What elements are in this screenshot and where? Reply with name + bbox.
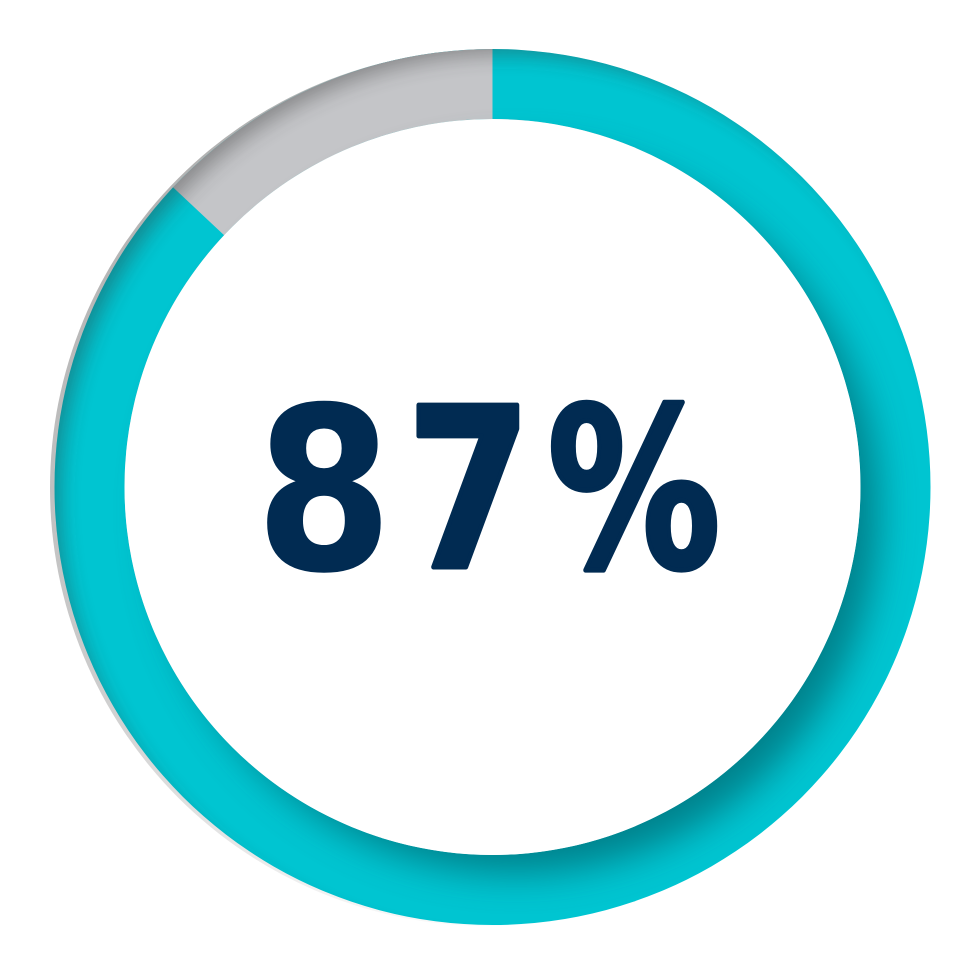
outer edge shading (54, 49, 850, 845)
percentage label: 7 (406, 360, 532, 620)
inner edge shading (154, 149, 878, 873)
percentage label: 8 (256, 359, 392, 622)
ring (54, 49, 930, 925)
outer shadow crescent (50, 50, 926, 926)
ring segment: 13% grey (173, 49, 492, 235)
percentage label: % (547, 361, 721, 619)
percentage label (256, 359, 721, 622)
centre white disc (124, 119, 860, 855)
